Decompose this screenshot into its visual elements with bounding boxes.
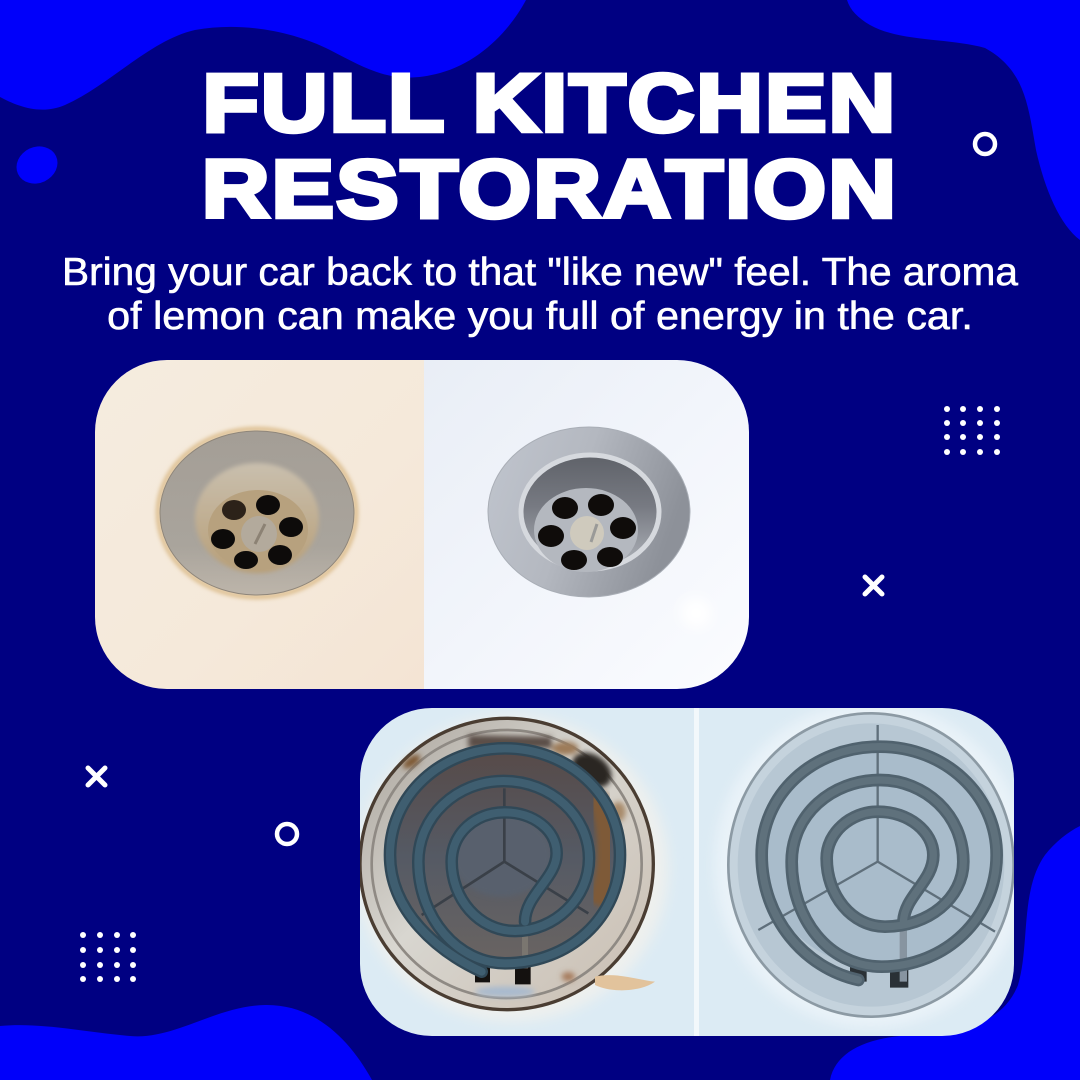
after side bbox=[424, 360, 749, 689]
terminals bbox=[475, 967, 531, 984]
drip stain bbox=[595, 975, 655, 990]
inner plate bbox=[764, 748, 994, 968]
subtitle text bbox=[62, 251, 1018, 338]
dot grid: bottom left bbox=[80, 932, 136, 982]
plate spokes bbox=[422, 788, 588, 915]
divider bbox=[694, 708, 699, 1036]
blob: top left bbox=[0, 0, 526, 110]
plate spokes bbox=[758, 725, 995, 932]
subtitle text: Bring your car back to that "like new" feel. The aroma bbox=[62, 251, 1018, 294]
panel: stove burner before and after bbox=[360, 708, 1014, 1036]
blob: top right bbox=[847, 0, 1080, 240]
before side bbox=[95, 360, 424, 689]
blob: bottom right bbox=[830, 826, 1080, 1080]
icon: ring top right bbox=[975, 134, 995, 154]
terminals bbox=[850, 967, 908, 988]
heating plate bbox=[396, 754, 614, 957]
heating coil bbox=[390, 748, 620, 972]
blob: bottom left bbox=[0, 1005, 372, 1080]
subtitle text: of lemon can make you full of energy in the car. bbox=[107, 295, 973, 338]
blob: small left bbox=[10, 140, 64, 190]
title: FULL KITCHEN bbox=[203, 58, 897, 148]
heating coil bbox=[762, 747, 997, 980]
icon: ring lower left bbox=[277, 824, 297, 844]
title bbox=[202, 58, 898, 235]
panel: sink drain before and after bbox=[95, 360, 749, 689]
dot grid: top right bbox=[944, 406, 1000, 455]
icon: cross left bbox=[88, 768, 105, 785]
outer metal ring bbox=[728, 713, 1014, 1017]
outer metal ring bbox=[360, 718, 653, 1010]
after burner bbox=[714, 702, 1028, 1028]
rust and soot patches bbox=[401, 735, 626, 997]
icon: cross right bbox=[865, 577, 882, 594]
title: RESTORATION bbox=[202, 144, 898, 235]
before burner bbox=[355, 715, 668, 1022]
